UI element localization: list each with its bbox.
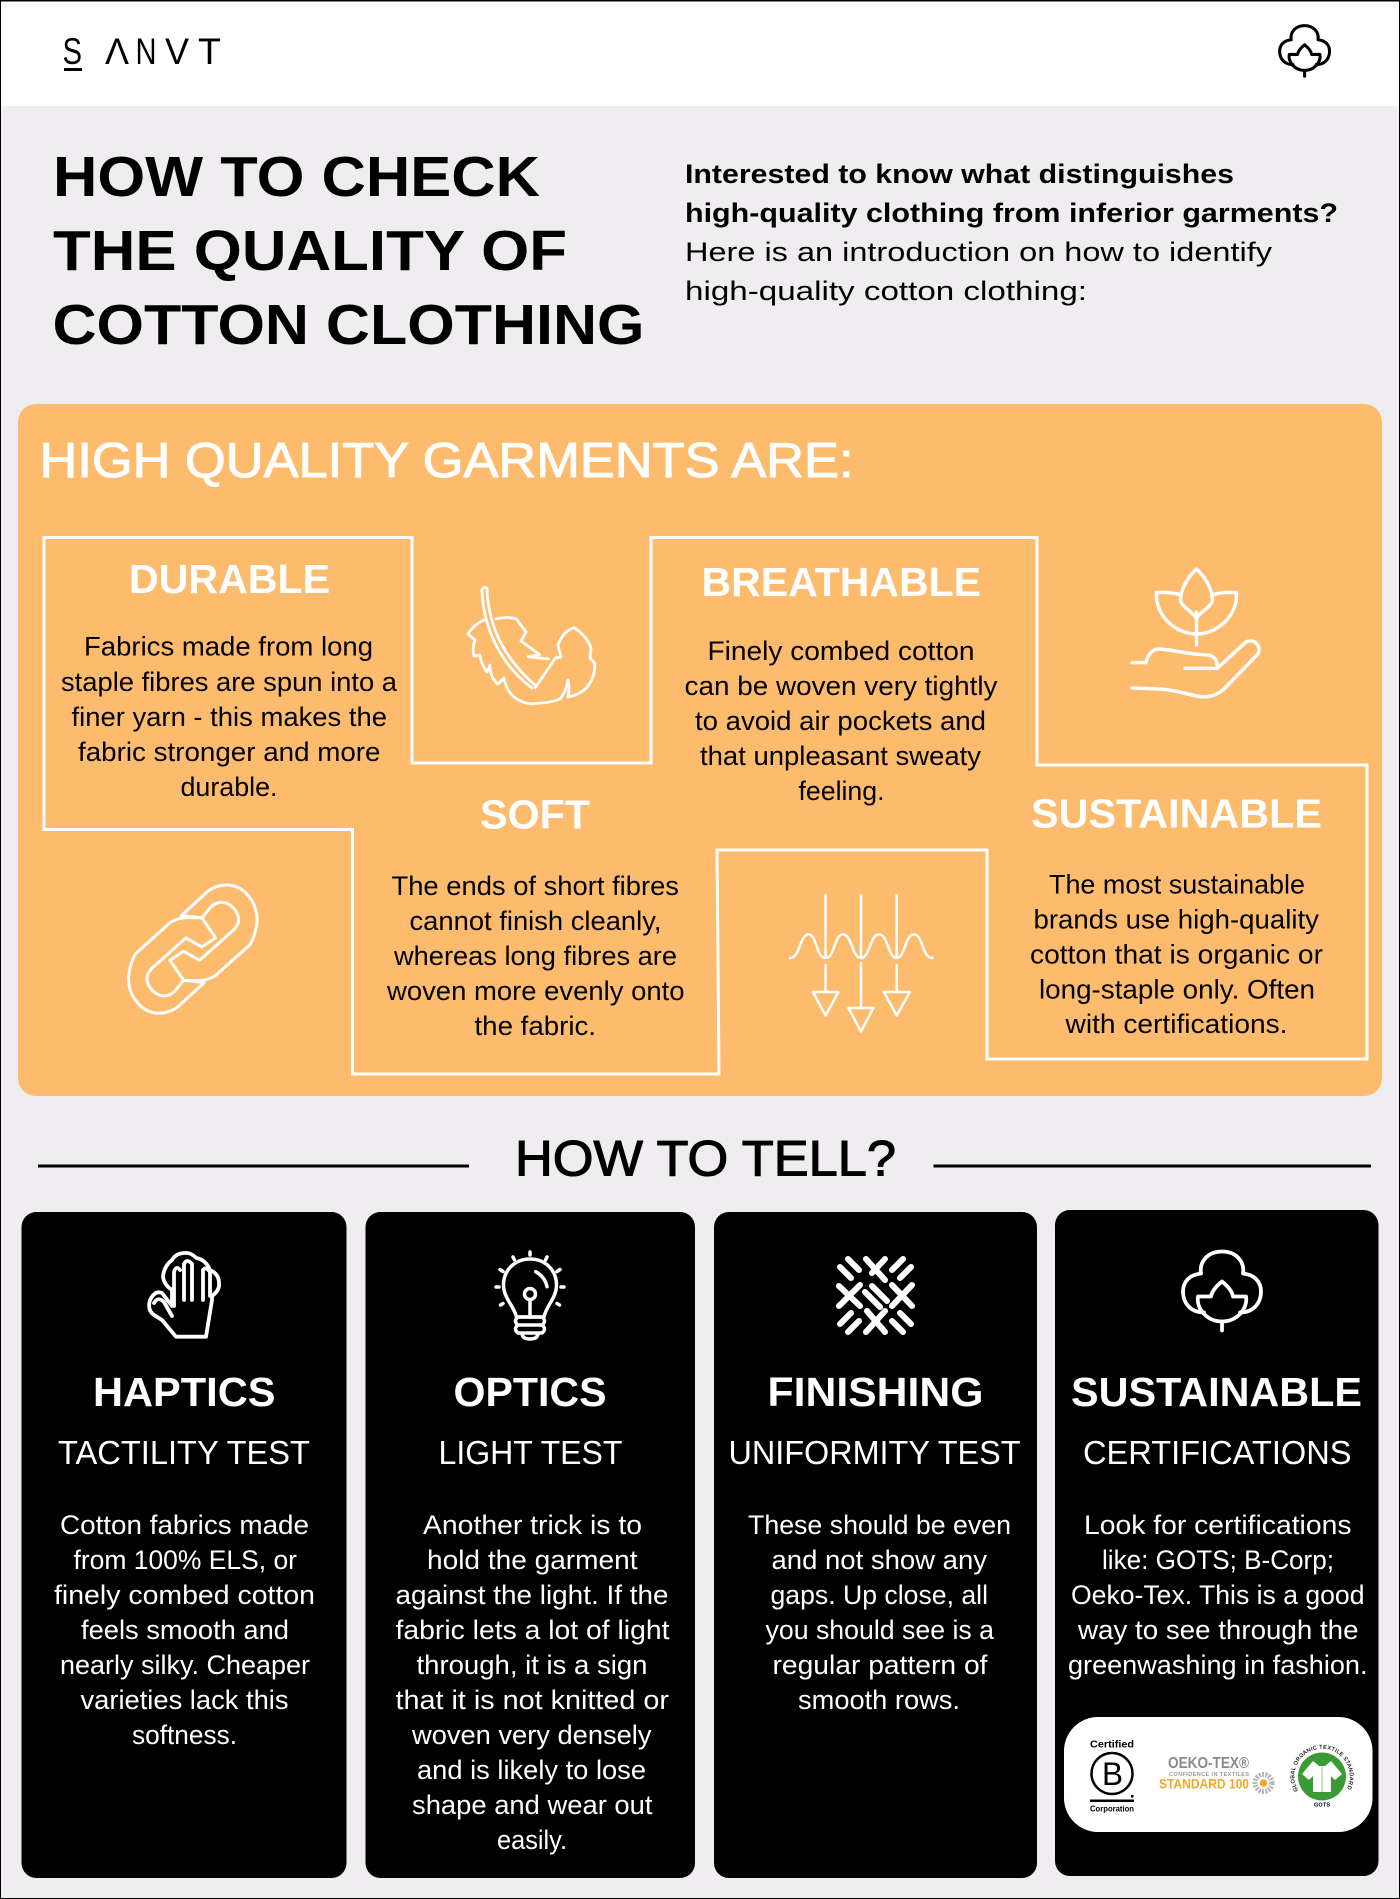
body text: hold the garment — [427, 1545, 638, 1575]
body text: you should see is a — [766, 1615, 995, 1645]
icon: feather — [468, 587, 595, 704]
body text: against the light. If the — [396, 1580, 668, 1610]
block: sustainable: SUSTAINABLE — [1031, 790, 1322, 836]
intro text: Interested to know what distinguishes — [685, 159, 1234, 189]
body text: fabric lets a lot of light — [396, 1615, 670, 1645]
block: durable — [61, 556, 398, 802]
body text: Cotton fabrics made — [60, 1510, 309, 1540]
block: soft: the fabric. — [474, 1011, 596, 1041]
logo: SANVT — [62, 31, 221, 72]
intro text — [685, 159, 1338, 306]
logo: GOTS: GLOBAL ORGANIC TEXTILE STANDARD — [1290, 1744, 1354, 1792]
block: sustainable: with certifications. — [1064, 1009, 1288, 1039]
heading: OPTICS — [454, 1369, 606, 1415]
block: durable: durable. — [180, 772, 278, 802]
subheading: UNIFORMITY TEST — [728, 1434, 1020, 1471]
block: breathable: BREATHABLE — [702, 559, 981, 605]
body text — [54, 1510, 315, 1750]
icon: hand — [149, 1253, 219, 1337]
heading: SUSTAINABLE — [1071, 1369, 1362, 1415]
logo: Oeko-Tex: CONFIDENCE IN TEXTILES — [1169, 1772, 1249, 1778]
icon: chain link — [129, 885, 257, 1013]
body text: through, it is a sign — [416, 1650, 648, 1680]
logo: B Corp: B — [1102, 1756, 1123, 1792]
subheading: TACTILITY TEST — [58, 1434, 310, 1471]
icon: woven pattern — [839, 1259, 912, 1332]
body text: like: GOTS; B-Corp; — [1102, 1545, 1334, 1575]
block: sustainable — [1030, 790, 1323, 1039]
panel: high quality garments — [18, 404, 1382, 1096]
logo: SANVT: V — [165, 31, 189, 72]
body text: nearly silky. Cheaper — [60, 1650, 310, 1680]
logo: B Corp — [1090, 1740, 1134, 1814]
panel heading: HIGH QUALITY GARMENTS ARE: — [40, 434, 854, 488]
logo: Oeko-Tex: STANDARD 100 — [1159, 1776, 1249, 1792]
icon: light bulb — [496, 1252, 564, 1339]
block: durable: staple fibres are spun into a — [61, 667, 398, 697]
block: soft: whereas long fibres are — [393, 941, 677, 971]
title: THE QUALITY OF — [53, 219, 567, 283]
card: haptics — [22, 1212, 346, 1878]
body text: and is likely to lose — [417, 1755, 646, 1785]
block: soft: woven more evenly onto — [386, 976, 684, 1006]
block: durable: DURABLE — [129, 556, 330, 602]
block: durable: Fabrics made from long — [84, 632, 373, 662]
icon: cotton boll — [1280, 26, 1330, 76]
body text: from 100% ELS, or — [74, 1545, 297, 1575]
logo: GOTS: GOTS — [1314, 1802, 1330, 1808]
header bar — [0, 0, 1400, 106]
intro text: high-quality clothing from inferior garments? — [685, 198, 1338, 228]
body text: smooth rows. — [798, 1685, 960, 1715]
intro text: high-quality cotton clothing: — [685, 276, 1087, 306]
body text — [1068, 1510, 1368, 1680]
icon: cotton boll — [1183, 1252, 1261, 1330]
logo: B Corp: Certified — [1090, 1740, 1134, 1750]
logo: SANVT: S — [62, 31, 82, 72]
body text: feels smooth and — [81, 1615, 289, 1645]
body text: Look for certifications — [1084, 1510, 1352, 1540]
title — [52, 145, 644, 357]
block: sustainable: cotton that is organic or — [1030, 940, 1323, 970]
body text: varieties lack this — [80, 1685, 288, 1715]
body text: finely combed cotton — [54, 1580, 315, 1610]
heading: HAPTICS — [93, 1369, 276, 1415]
logo: SANVT: N — [136, 31, 156, 72]
body text — [396, 1510, 670, 1855]
body text: way to see through the — [1077, 1615, 1358, 1645]
heading: FINISHING — [768, 1369, 984, 1415]
body text: regular pattern of — [772, 1650, 988, 1680]
block: breathable — [684, 559, 998, 806]
block: sustainable: long-staple only. Often — [1039, 974, 1315, 1004]
logo: B Corp: Corporation — [1090, 1804, 1134, 1814]
body text: These should be even — [748, 1510, 1011, 1540]
block: soft: cannot finish cleanly, — [410, 906, 662, 936]
block: breathable: can be woven very tightly — [684, 671, 998, 701]
body text: gaps. Up close, all — [770, 1580, 988, 1610]
intro text: Here is an introduction on how to identify — [685, 237, 1273, 267]
body text: that it is not knitted or — [396, 1685, 669, 1715]
section heading: how to tell — [38, 1130, 1371, 1186]
block: durable: fabric stronger and more — [78, 737, 380, 767]
body text — [748, 1510, 1011, 1715]
block: breathable: that unpleasant sweaty — [700, 741, 982, 771]
title: HOW TO CHECK — [53, 145, 540, 209]
logo: Oeko-Tex: OEKO-TEX® — [1168, 1755, 1250, 1772]
block: sustainable: brands use high-quality — [1034, 904, 1319, 934]
body text: Another trick is to — [423, 1510, 642, 1540]
stepped outline frame — [44, 538, 1367, 1074]
body text: shape and wear out — [412, 1790, 653, 1820]
body text: woven very densely — [411, 1720, 652, 1750]
icon: plant in hand — [1132, 569, 1259, 697]
block: breathable: feeling. — [798, 776, 884, 806]
section heading: how to tell: HOW TO TELL? — [515, 1130, 896, 1186]
body text: and not show any — [772, 1545, 988, 1575]
block: soft — [386, 792, 684, 1041]
subheading: LIGHT TEST — [438, 1434, 622, 1471]
block: durable: finer yarn - this makes the — [72, 702, 387, 732]
block: soft: The ends of short fibres — [392, 871, 679, 901]
title: COTTON CLOTHING — [52, 293, 644, 357]
icon: moisture arrows through fabric — [790, 895, 932, 1032]
card: optics — [366, 1212, 695, 1878]
logo: Oeko-Tex — [1159, 1755, 1272, 1792]
subheading: CERTIFICATIONS — [1083, 1434, 1352, 1471]
certification logos panel — [1064, 1717, 1372, 1832]
card: finishing — [714, 1212, 1037, 1878]
card: sustainable certifications — [1055, 1210, 1378, 1876]
body text: softness. — [132, 1720, 237, 1750]
block: breathable: Finely combed cotton — [708, 636, 974, 666]
block: sustainable: The most sustainable — [1049, 870, 1305, 900]
logo: SANVT: T — [198, 31, 221, 72]
body text: greenwashing in fashion. — [1068, 1650, 1368, 1680]
body text: Oeko-Tex. This is a good — [1071, 1580, 1364, 1610]
logo: SANVT: Λ — [105, 31, 129, 72]
block: soft: SOFT — [480, 792, 590, 838]
block: breathable: to avoid air pockets and — [695, 706, 986, 736]
body text: easily. — [497, 1825, 567, 1855]
